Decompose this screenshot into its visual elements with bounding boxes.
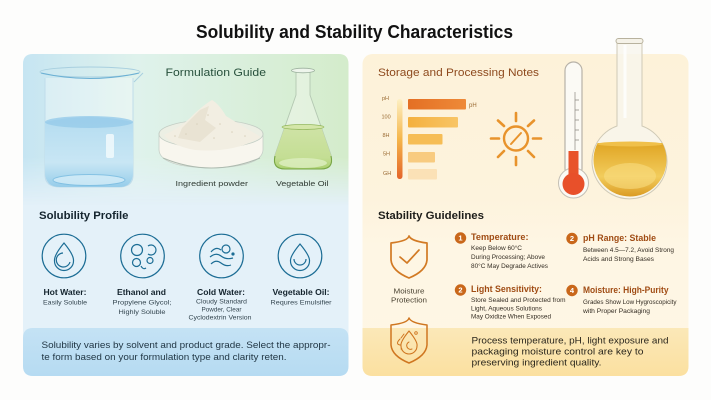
heading: stability guidelines: Stability Guidelines bbox=[378, 210, 484, 222]
label: ingredient powder: Ingredient powder bbox=[176, 179, 249, 188]
guideline: light sensitivity: Store Sealed and Protected from bbox=[471, 298, 566, 304]
icon: beaker with water bbox=[40, 67, 143, 187]
item: cold water: Cloudy Standard bbox=[196, 300, 247, 306]
icon: hot water drop bbox=[42, 234, 86, 278]
item: vegetable oil: Requres Emulsifier bbox=[270, 300, 332, 306]
icon: ethanol and glycol bubbles bbox=[121, 234, 164, 278]
item: cold water: Cold Water: bbox=[197, 288, 245, 297]
label: moisture protection bbox=[391, 286, 427, 304]
label: moisture protection: Protection bbox=[391, 296, 427, 304]
callout: stability note: preserving ingredient quality. bbox=[472, 358, 602, 368]
guideline: moisture: 4 bbox=[570, 286, 575, 295]
item: ethanol and propylene glycol: Ethanol and bbox=[117, 288, 166, 297]
icon: vegetable oil drop bbox=[278, 234, 322, 278]
guideline: light sensitivity: Light, Aqueous Solutions bbox=[471, 306, 542, 312]
guideline: light sensitivity: 2 bbox=[458, 286, 463, 295]
icon: thermometer bbox=[558, 62, 588, 198]
guideline: moisture bbox=[566, 285, 676, 315]
guideline: moisture: with Proper Packaging bbox=[582, 309, 650, 315]
panel: stability bbox=[362, 38, 688, 376]
title: Solubility and Stability Characteristics bbox=[196, 22, 513, 42]
icon: droplet and leaf shield bbox=[391, 318, 427, 363]
item: ethanol and propylene glycol: Propylene Glycol; bbox=[112, 300, 172, 306]
callout: stability note: packaging moisture control are key to bbox=[472, 346, 644, 358]
item: vegetable oil: Vegetable Oil: bbox=[272, 288, 330, 297]
guideline: ph range: 2 bbox=[570, 234, 574, 243]
icon: cold water waves bbox=[200, 234, 243, 278]
guideline: temperature: Temperature: bbox=[471, 232, 528, 242]
item: cold water bbox=[188, 288, 252, 322]
heading: storage and processing notes: Storage and Processing Notes bbox=[378, 67, 540, 79]
guideline: light sensitivity: May Oxidize When Exposed bbox=[471, 314, 551, 320]
guideline: light sensitivity bbox=[455, 284, 566, 320]
chart: ph bars: 100 bbox=[382, 114, 391, 120]
guideline: ph range: Between 4.5—7.2, Avoid Strong bbox=[583, 248, 674, 254]
guideline: moisture: Moisture: High-Purity bbox=[583, 285, 668, 295]
item: ethanol and propylene glycol: Highly Soluble bbox=[118, 309, 166, 316]
guideline: ph range: pH Range: Stable bbox=[583, 233, 656, 243]
callout: solubility note: Solubility varies by solvent and product grade. Select the appropr- bbox=[42, 340, 330, 351]
callout: solubility note: te form based on your formulation type and clarity reten. bbox=[42, 352, 286, 363]
label: vegetable oil: Vegetable Oil bbox=[276, 179, 329, 188]
heading: solubility profile: Solubility Profile bbox=[39, 210, 128, 222]
chart: ph bars: 8H bbox=[382, 133, 390, 139]
item: hot water: Easily Soluble bbox=[43, 300, 87, 306]
guideline: ph range: Acids and Strong Bases bbox=[583, 257, 654, 263]
callout: stability note: Process temperature, pH, light exposure and bbox=[472, 336, 668, 346]
icon: sun bbox=[491, 113, 541, 165]
icon: moisture protection shield bbox=[391, 236, 427, 278]
guideline: temperature: During Processing; Above bbox=[471, 255, 546, 261]
guideline: temperature: Keep Below 60°C bbox=[471, 246, 523, 252]
guideline: temperature: 1 bbox=[458, 234, 463, 243]
guideline: moisture: Grades Show Low Hygroscopicity bbox=[583, 300, 676, 306]
chart: ph bars: pH bbox=[469, 103, 477, 109]
chart: ph bars: pH bbox=[382, 96, 389, 102]
item: cold water: Cyclodextrin Version bbox=[188, 316, 252, 322]
guideline: temperature bbox=[455, 232, 548, 270]
image: ingredient powder dish bbox=[159, 100, 263, 168]
panel: solubility bbox=[23, 54, 348, 376]
guideline: ph range bbox=[566, 233, 674, 263]
callout: stability note bbox=[362, 328, 688, 376]
item: vegetable oil bbox=[270, 288, 332, 306]
item: hot water bbox=[43, 288, 87, 306]
guideline: light sensitivity: Light Sensitivity: bbox=[471, 284, 542, 294]
item: ethanol and propylene glycol bbox=[112, 288, 172, 316]
icon: flask with vegetable oil bbox=[274, 68, 334, 171]
chart: ph bars: GH bbox=[383, 171, 391, 177]
chart: ph bars: 5H bbox=[383, 152, 390, 158]
heading: formulation guide: Formulation Guide bbox=[166, 67, 266, 79]
item: hot water: Hot Water: bbox=[44, 288, 86, 297]
callout: solubility note bbox=[23, 328, 348, 376]
item: cold water: Powder, Clear bbox=[202, 308, 242, 314]
icon: flask with golden oil bbox=[590, 38, 670, 199]
label: moisture protection: Moisture bbox=[394, 286, 424, 296]
guideline: temperature: 80°C May Degrade Actives bbox=[471, 264, 548, 270]
chart: ph bars bbox=[382, 96, 477, 180]
